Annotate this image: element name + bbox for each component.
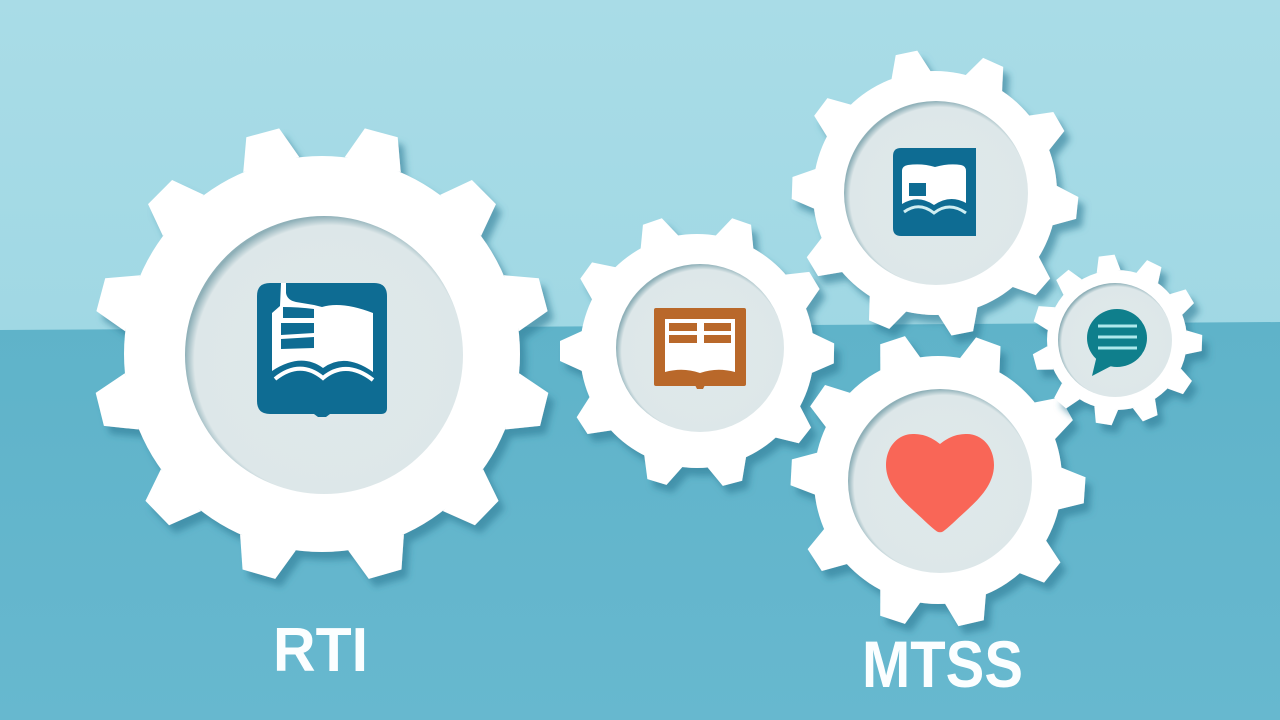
icon: heart	[886, 434, 994, 532]
icon: RTI book	[257, 283, 387, 417]
gear: top right	[791, 49, 1079, 337]
label: MTSS: MTSS	[862, 627, 1023, 701]
label: RTI: RTI	[273, 616, 368, 685]
icon: orange book	[654, 308, 746, 389]
icon: speech bubble	[1087, 309, 1147, 376]
icon: blue book with picture	[893, 148, 976, 236]
gear: bottom right	[790, 334, 1086, 628]
background: lower teal band	[0, 322, 1280, 720]
gear: centre	[560, 215, 834, 489]
gear: small right	[1032, 254, 1202, 426]
gear: RTI large	[93, 125, 551, 582]
background: upper light band	[0, 0, 1280, 340]
